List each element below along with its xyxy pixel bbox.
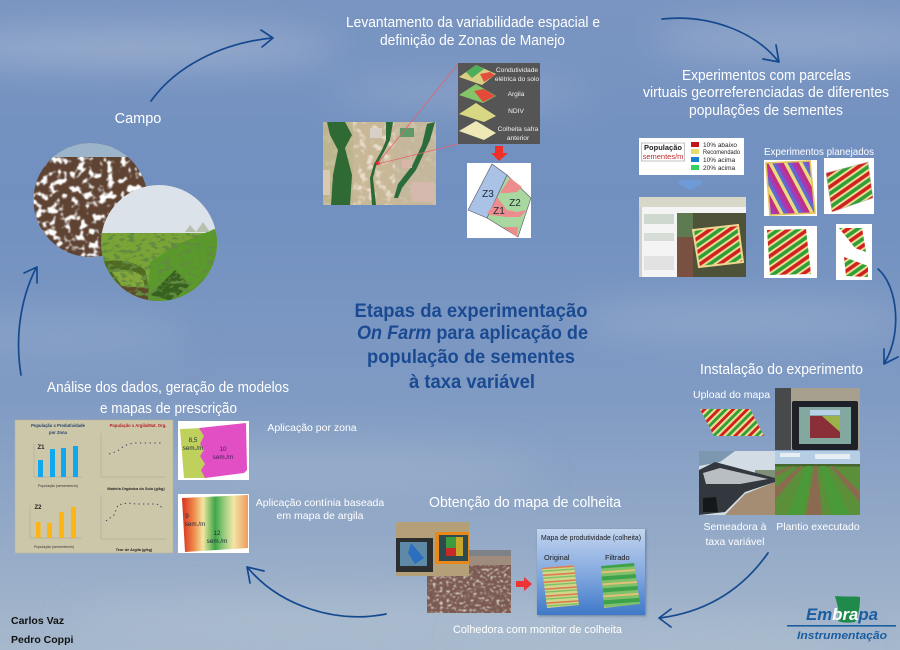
scatter: argila bbox=[101, 495, 166, 552]
labels: semeadora e plantio: taxa variável bbox=[706, 536, 764, 548]
scatter: matéria orgânica: Matéria Orgânica do Solo (g/kg) bbox=[107, 487, 165, 491]
panel: mapa de produtividade: Original bbox=[544, 553, 570, 562]
logo: Embrapa: Embrapa bbox=[806, 605, 878, 624]
arrow: levantamento to experimentos bbox=[662, 18, 779, 62]
heading: análise: Análise dos dados, geração de modelos bbox=[47, 380, 289, 396]
map: management zones: Z1 bbox=[493, 206, 505, 217]
panel: data layers bbox=[458, 63, 540, 144]
photo: harvest monitors bbox=[396, 522, 469, 576]
logo: Embrapa bbox=[787, 596, 896, 642]
plan thumbnail 3 bbox=[764, 226, 817, 278]
layer labels: Condutividade bbox=[496, 67, 538, 74]
prescription map: continuous: sem./m bbox=[185, 521, 205, 528]
labels: aplicação: Aplicação por zona bbox=[267, 422, 357, 434]
heading: levantamento: Levantamento da variabilidade espacial e bbox=[346, 15, 600, 31]
scatter: matéria orgânica bbox=[101, 433, 166, 491]
heading: experimentos: Experimentos com parcelas bbox=[682, 68, 851, 84]
panel: mapa de produtividade bbox=[537, 529, 645, 615]
heading: análise: e mapas de prescrição bbox=[100, 401, 237, 417]
labels: semeadora e plantio bbox=[703, 521, 860, 548]
labels: semeadora e plantio: Semeadora à bbox=[703, 521, 767, 533]
arrow: experimentos to instalação bbox=[878, 269, 898, 364]
prescription map: by zone: 8,5 bbox=[189, 437, 198, 444]
heading: Campo: Campo bbox=[115, 111, 161, 127]
label: experimentos planejados: Experimentos planejados bbox=[764, 147, 874, 158]
logo: Embrapa: Instrumentação bbox=[797, 630, 887, 642]
panel: mapa de produtividade: Mapa de produtividade (colheita) bbox=[541, 533, 641, 542]
prescription map: by zone bbox=[178, 421, 249, 480]
title: Etapas da experimentação bbox=[354, 301, 588, 322]
bar chart: Z2: Z2 bbox=[34, 505, 42, 511]
plan thumbnail 1 bbox=[764, 160, 817, 216]
legend: população: 10% acima bbox=[703, 157, 736, 164]
map: management zones bbox=[467, 163, 531, 238]
caption: colhedora: Colhedora com monitor de colheita bbox=[453, 624, 623, 636]
plan thumbnail 4 bbox=[836, 224, 872, 280]
layer: argila map bbox=[459, 84, 496, 103]
icon: red right arrow bbox=[516, 577, 532, 591]
bar chart: Z2: População (sementes/m) bbox=[34, 545, 74, 549]
heading: levantamento: definição de Zonas de Manejo bbox=[380, 33, 565, 49]
bar chart: Z2 bbox=[30, 505, 82, 549]
heading: experimentos bbox=[643, 68, 889, 119]
software screenshot bbox=[639, 197, 746, 277]
layer labels: Argila bbox=[508, 91, 525, 98]
photo: planter bbox=[699, 451, 775, 515]
layer labels: Colheita safra bbox=[498, 126, 539, 133]
satellite image bbox=[323, 64, 458, 205]
authors bbox=[11, 615, 73, 646]
plan thumbnail 2 bbox=[824, 158, 874, 214]
labels: aplicação: em mapa de argila bbox=[277, 510, 364, 522]
photo: planted field bbox=[775, 451, 860, 515]
legend: população: 20% acima bbox=[703, 165, 736, 172]
map: management zones: Z3 bbox=[482, 189, 494, 200]
panel: charts: População x Argila/Mat. Org. bbox=[110, 423, 166, 428]
prescription map: continuous: 12 bbox=[213, 530, 221, 537]
labels: aplicação: Aplicação contínia baseada bbox=[256, 497, 384, 509]
layer: NDIV map bbox=[459, 103, 496, 122]
photo: cotton harvest bbox=[427, 550, 511, 613]
prescription map: by zone: sem./m bbox=[183, 445, 203, 452]
heading: experimentos: populações de sementes bbox=[689, 103, 843, 119]
label: upload do mapa: Upload do mapa bbox=[693, 389, 770, 401]
title bbox=[354, 301, 588, 393]
arrow: instalação to colheita bbox=[659, 553, 768, 627]
legend: população: 10% abaixo bbox=[703, 142, 737, 149]
map: filtrado bbox=[601, 563, 640, 608]
title: On Farm para aplicação de bbox=[357, 323, 588, 344]
prescription map: continuous: 9 bbox=[185, 513, 189, 520]
bar chart: Z1 bbox=[34, 444, 82, 488]
legend: população bbox=[639, 138, 744, 175]
labels: semeadora e plantio: Plantio executado bbox=[776, 521, 860, 533]
layer: condutividade map bbox=[459, 65, 496, 85]
stripe map bbox=[700, 409, 764, 436]
heading: instalação: Instalação do experimento bbox=[700, 362, 863, 378]
layer labels: anterior bbox=[507, 135, 530, 142]
title: população de sementes bbox=[367, 347, 575, 368]
labels: aplicação bbox=[256, 422, 384, 522]
legend: população: População bbox=[644, 143, 682, 152]
authors: Pedro Coppi bbox=[11, 634, 73, 646]
prescription map: by zone: 10 bbox=[219, 446, 227, 453]
heading: levantamento bbox=[346, 15, 600, 49]
panel: charts: por Zona bbox=[49, 430, 68, 435]
layer labels bbox=[495, 67, 540, 142]
heading: obtenção: Obtenção do mapa de colheita bbox=[429, 495, 622, 511]
map: original bbox=[542, 565, 579, 608]
arrow: colheita to análise bbox=[247, 567, 386, 617]
prescription map: continuous bbox=[178, 494, 249, 553]
panel: mapa de produtividade: Filtrado bbox=[605, 553, 630, 562]
icon: blue down arrow bbox=[679, 180, 702, 190]
bar chart: Z1: População (sementes/m) bbox=[38, 484, 78, 488]
heading: experimentos: virtuais georreferenciadas de diferentes bbox=[643, 85, 889, 101]
photo: cotton field bbox=[33, 143, 148, 258]
panel: charts: População x Produtividade bbox=[31, 423, 86, 428]
layer labels: NDIV bbox=[508, 108, 524, 115]
map: management zones: Z2 bbox=[509, 198, 521, 209]
arrow: campo to levantamento bbox=[151, 30, 273, 101]
prescription map: by zone: sem./m bbox=[213, 454, 233, 461]
heading: análise bbox=[47, 380, 289, 417]
photo: corn field bbox=[101, 185, 217, 301]
panel: charts bbox=[15, 420, 173, 553]
scatter: argila: Teor de Argila (g/kg) bbox=[116, 548, 153, 552]
arrow: análise to campo bbox=[19, 267, 37, 375]
photo: tractor monitor bbox=[775, 388, 860, 450]
icon: red down arrow bbox=[491, 146, 508, 161]
legend: população: sementes/m bbox=[643, 152, 683, 161]
layer labels: elétrica do solo bbox=[495, 76, 540, 83]
bar chart: Z1: Z1 bbox=[37, 445, 45, 451]
layer: colheita map bbox=[459, 121, 496, 140]
title: à taxa variável bbox=[409, 372, 535, 393]
legend: população: Recomendado bbox=[703, 149, 740, 156]
prescription map: continuous: sem./m bbox=[207, 538, 227, 545]
authors: Carlos Vaz bbox=[11, 615, 64, 627]
